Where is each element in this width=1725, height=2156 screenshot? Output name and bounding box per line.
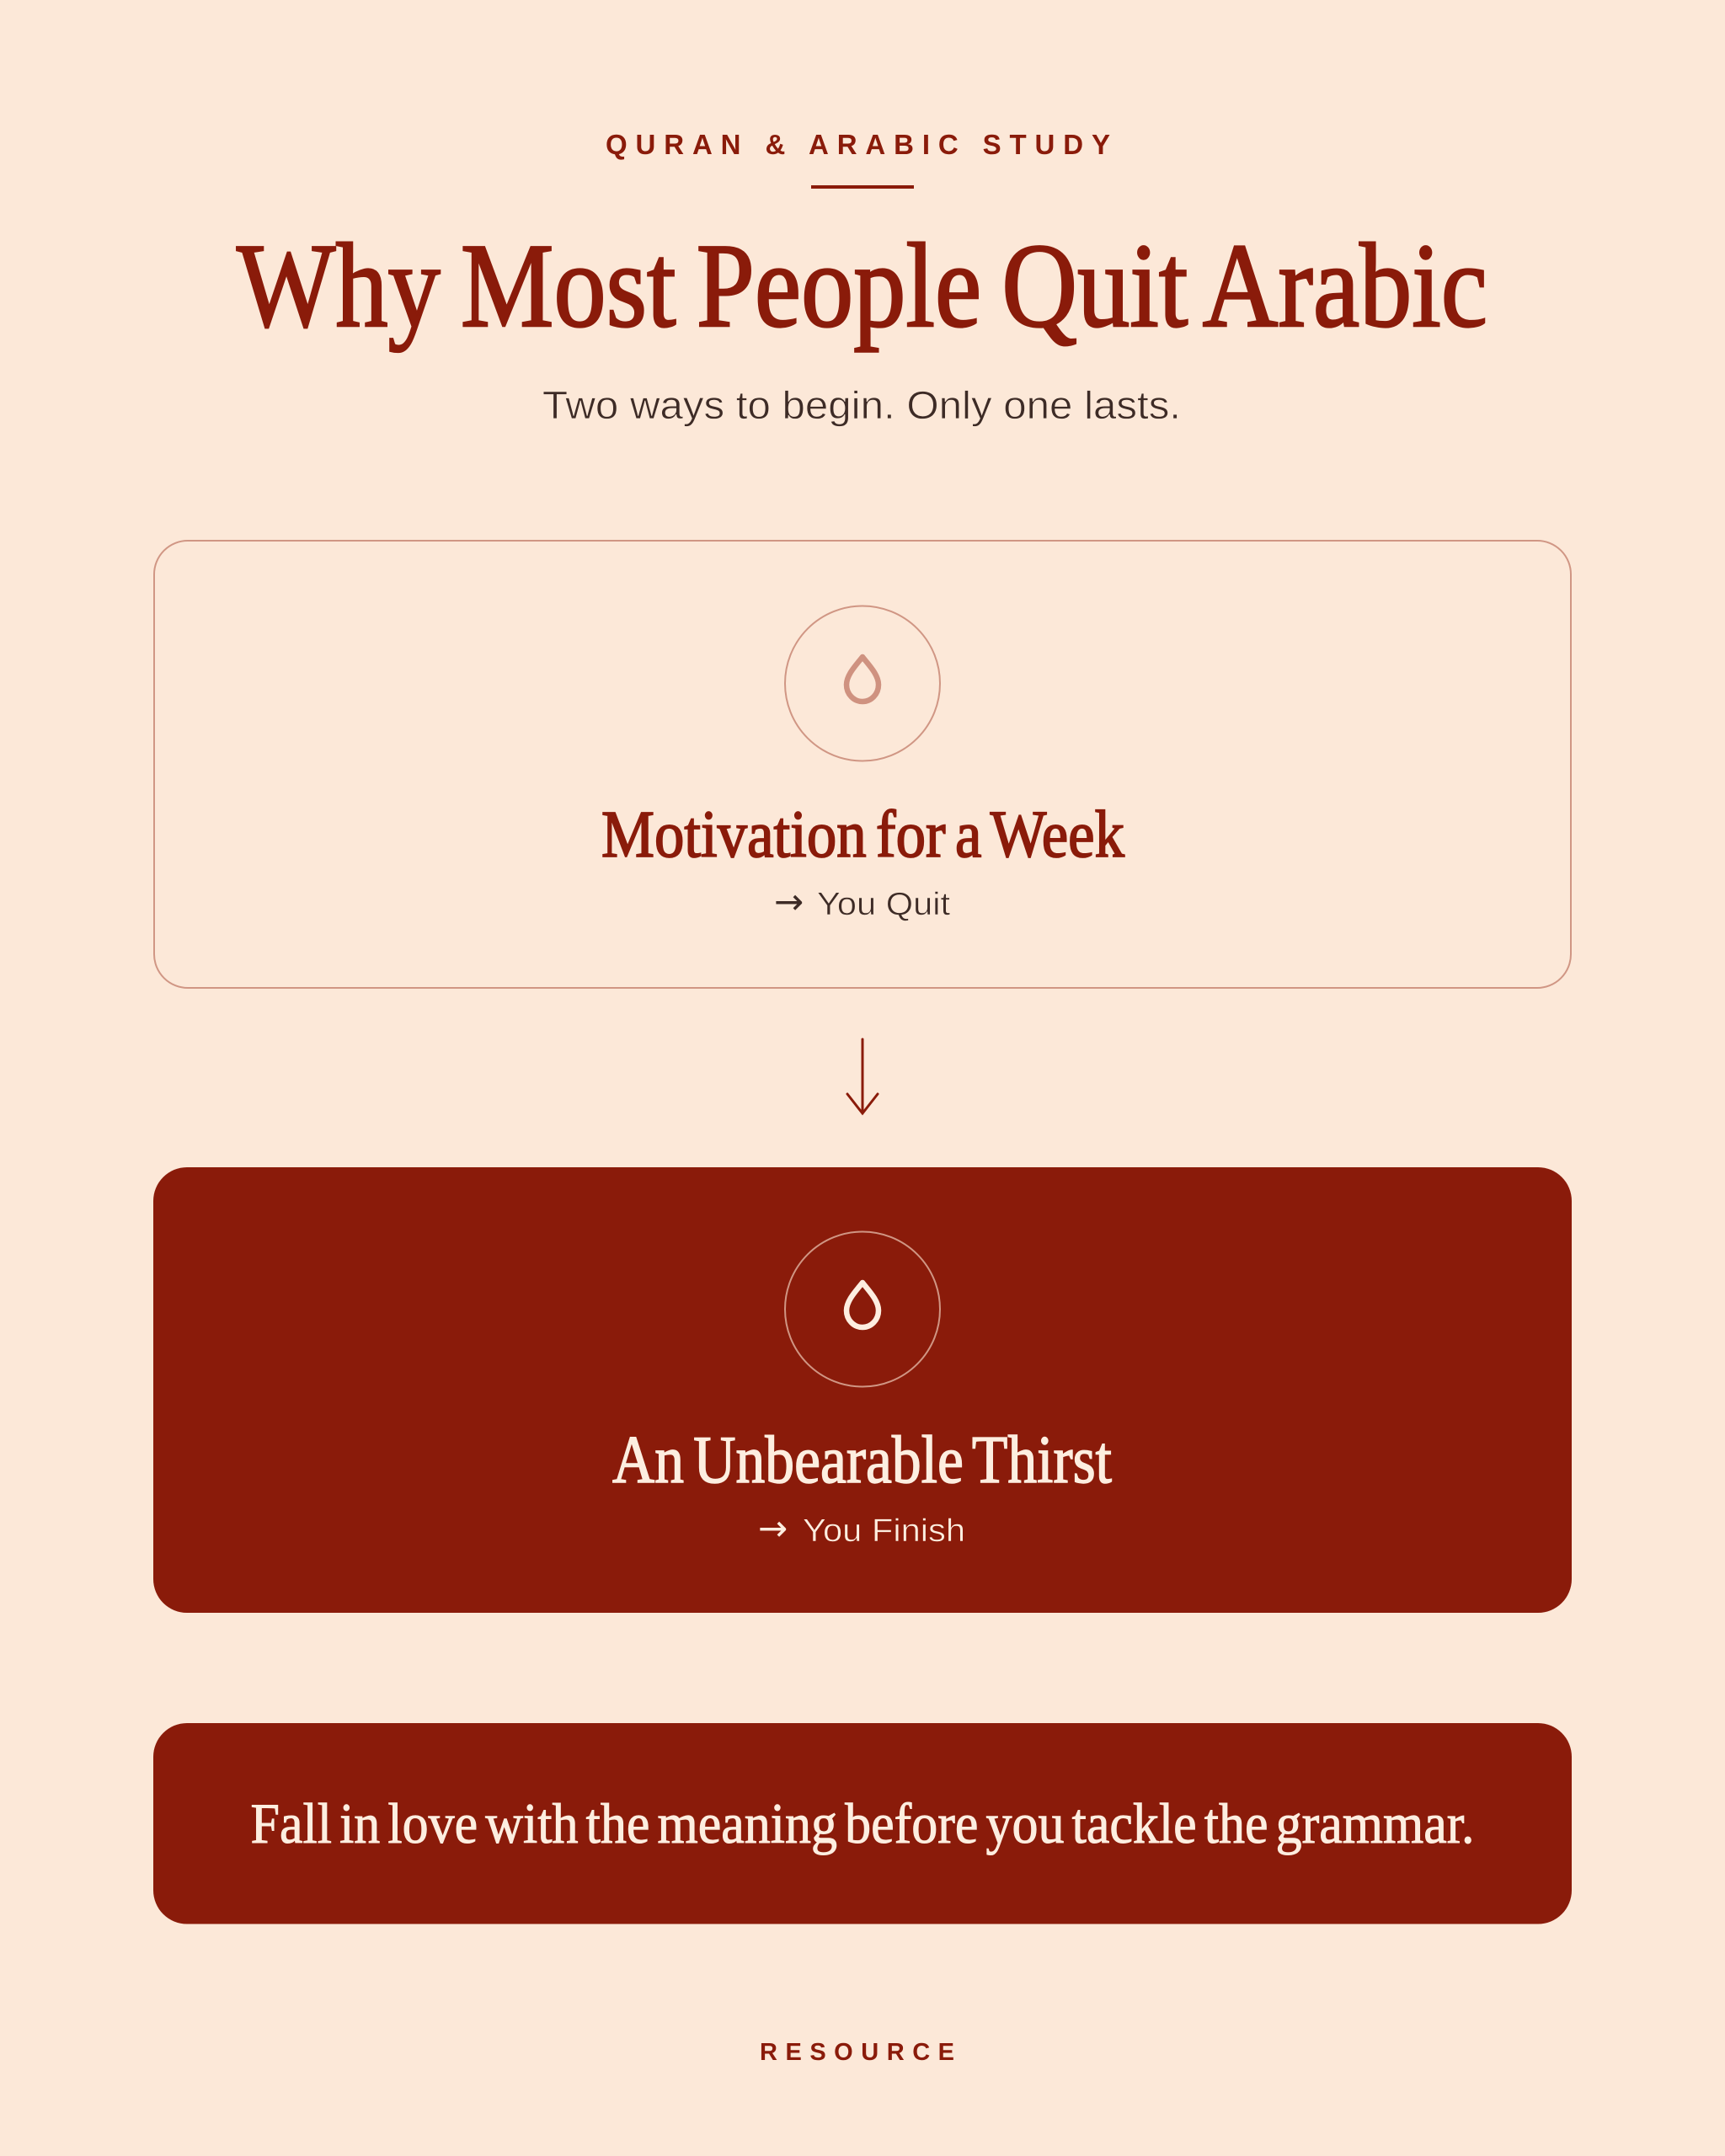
eyebrow label: QURAN & ARABIC STUDY [606,129,1110,160]
title: Why Most People Quit Arabic [237,219,1487,352]
panel: an unbearable thirst [153,1167,1572,1613]
card heading: An Unbearable Thirst [612,1423,1112,1497]
card outcome: You Finish [803,1513,965,1549]
panel: motivation for a week [154,541,1571,988]
icon: cream water drop in circle [785,1231,940,1386]
card heading: Motivation for a Week [601,798,1124,872]
subtitle: Two ways to begin. Only one lasts. [542,383,1181,427]
footer label: RESOURCE [760,2039,954,2066]
eyebrow rule [811,185,914,189]
icon: small right arrow: → [774,881,804,922]
icon: outlined water drop in circle [785,606,940,761]
icon: small right arrow: → [758,1508,788,1549]
quote text: Fall in love with the meaning before you tackle the grammar. [251,1791,1474,1855]
panel: closing statement [153,1723,1572,1924]
card outcome: You Quit [817,887,950,922]
arrow: down connector [847,1039,878,1113]
